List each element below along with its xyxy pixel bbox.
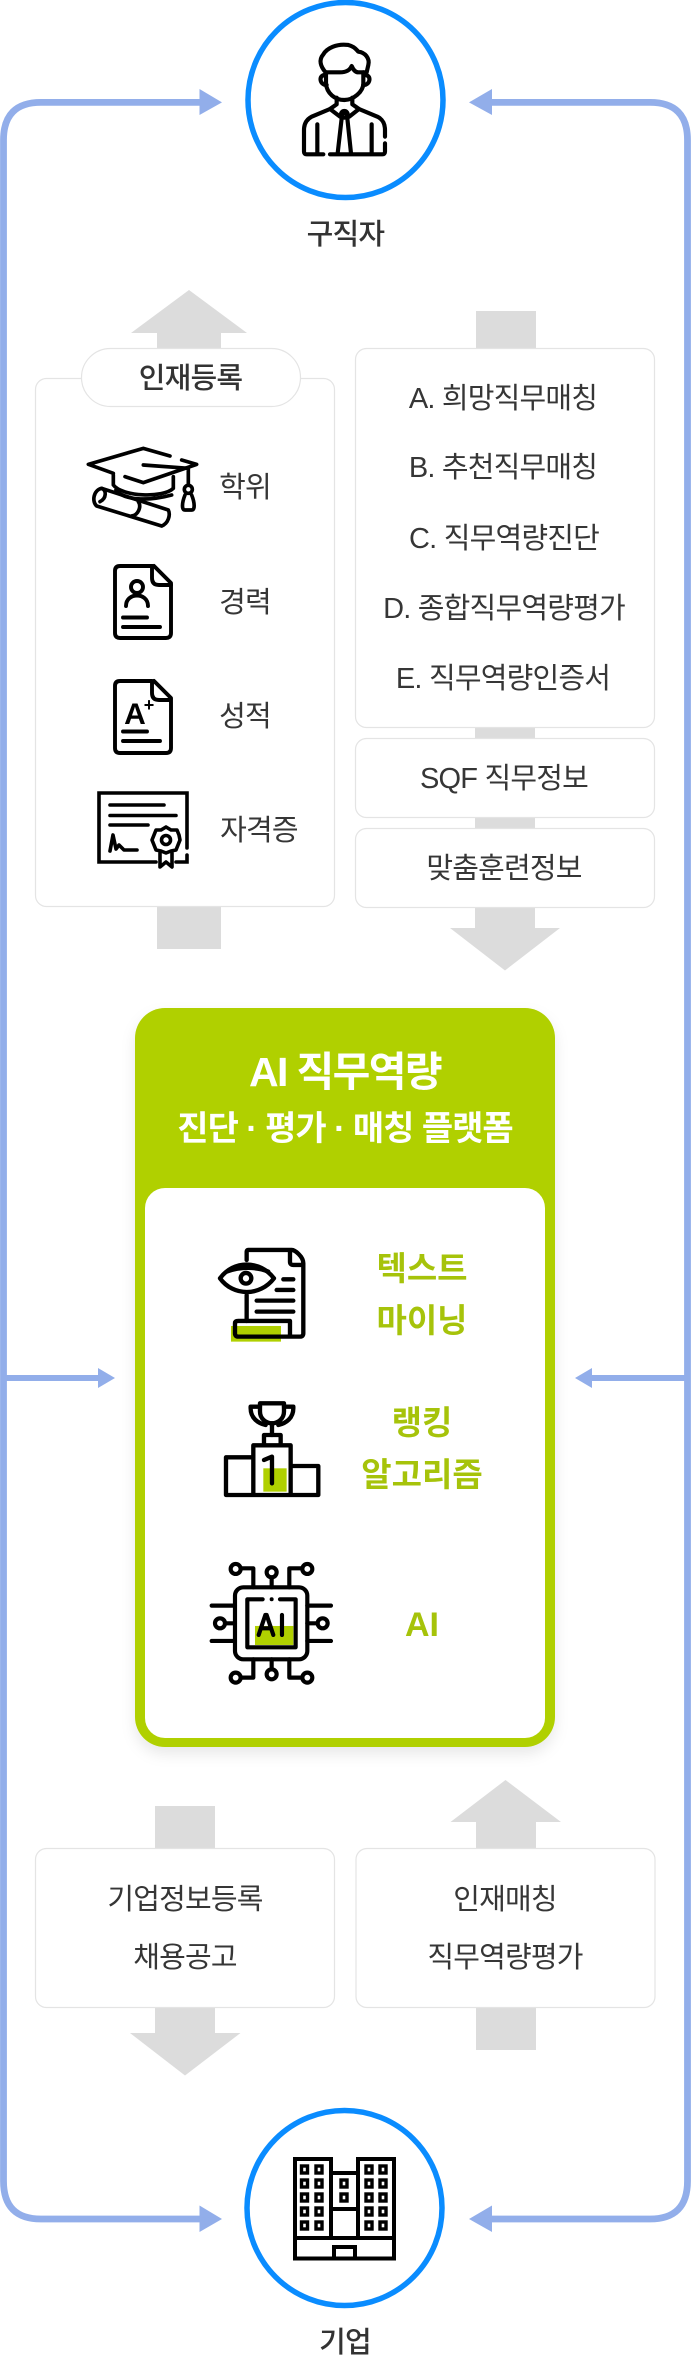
text: career: 경력 xyxy=(219,587,271,619)
icon: trophy on podium xyxy=(226,1403,318,1495)
text: item E: E. 직무역량인증서 xyxy=(396,663,610,695)
arrow: stub below talent registration xyxy=(157,906,221,949)
text: grades: 성적 xyxy=(219,701,271,733)
panel: company registration: 채용공고 xyxy=(133,1942,237,1974)
panel: AI platform xyxy=(135,1008,555,1747)
icon: building xyxy=(295,2159,394,2258)
text: degree: 학위 xyxy=(219,471,271,504)
panel: company registration xyxy=(36,1848,334,2008)
panel: SQF job information xyxy=(356,738,654,818)
text: ranking algorithm: 알고리즘 xyxy=(361,1456,483,1493)
label: job seeker: 구직자 xyxy=(307,218,384,251)
heading: 진단 · 평가 · 매칭 플랫폼 xyxy=(177,1110,513,1148)
text: item C: C. 직무역량진단 xyxy=(409,522,599,555)
pill heading xyxy=(82,348,300,406)
connector: right loop arrows xyxy=(469,89,688,2232)
text: certification: 자격증 xyxy=(220,815,298,847)
text: item B: B. 추천직무매칭 xyxy=(409,452,597,484)
node: company xyxy=(247,2110,442,2306)
icon: grade document: A xyxy=(124,698,146,731)
icon: AI chip xyxy=(212,1564,331,1683)
pill heading: 인재등록 xyxy=(139,362,242,395)
arrow: stub above services card xyxy=(476,311,536,349)
node: job seeker xyxy=(248,2,443,198)
panel: talent matching: 직무역량평가 xyxy=(427,1942,583,1974)
text: ranking algorithm: 랭킹 xyxy=(392,1404,452,1441)
text: text mining xyxy=(376,1250,468,1339)
text: item A: A. 희망직무매칭 xyxy=(409,383,597,415)
connector: left loop arrows xyxy=(3,89,222,2232)
panel: SQF job information: SQF 직무정보 xyxy=(420,763,588,795)
text: ranking algorithm xyxy=(361,1404,483,1493)
heading xyxy=(177,1049,513,1148)
arrow: up from talent registration xyxy=(131,290,247,348)
arrow: down from company registration xyxy=(130,1806,240,2076)
icon: grade document: + xyxy=(144,695,154,715)
panel: talent matching: 인재매칭 xyxy=(453,1884,557,1916)
text: AI: AI xyxy=(405,1606,439,1644)
panel: talent matching xyxy=(356,1848,655,2008)
text: text mining: 마이닝 xyxy=(376,1302,468,1339)
icon: person in suit xyxy=(304,45,385,154)
panel: customized training information: 맞춤훈련정보 xyxy=(426,852,582,885)
icon: grade document xyxy=(115,681,171,753)
text: item D: D. 종합직무역량평가 xyxy=(383,593,625,625)
heading: AI 직무역량 xyxy=(249,1049,442,1095)
panel: job services list xyxy=(356,348,654,728)
icon: certificate xyxy=(99,793,187,867)
text: text mining: 텍스트 xyxy=(376,1250,468,1287)
arrow: down to platform xyxy=(450,700,560,970)
panel: talent registration xyxy=(36,348,334,906)
icon: resume document xyxy=(115,566,171,638)
icon: eye and document xyxy=(220,1250,303,1342)
panel: company registration: 기업정보등록 xyxy=(107,1883,263,1916)
arrow: up from talent matching xyxy=(450,1780,561,2050)
icon: graduation cap xyxy=(88,448,197,526)
panel: customized training information xyxy=(356,828,654,908)
